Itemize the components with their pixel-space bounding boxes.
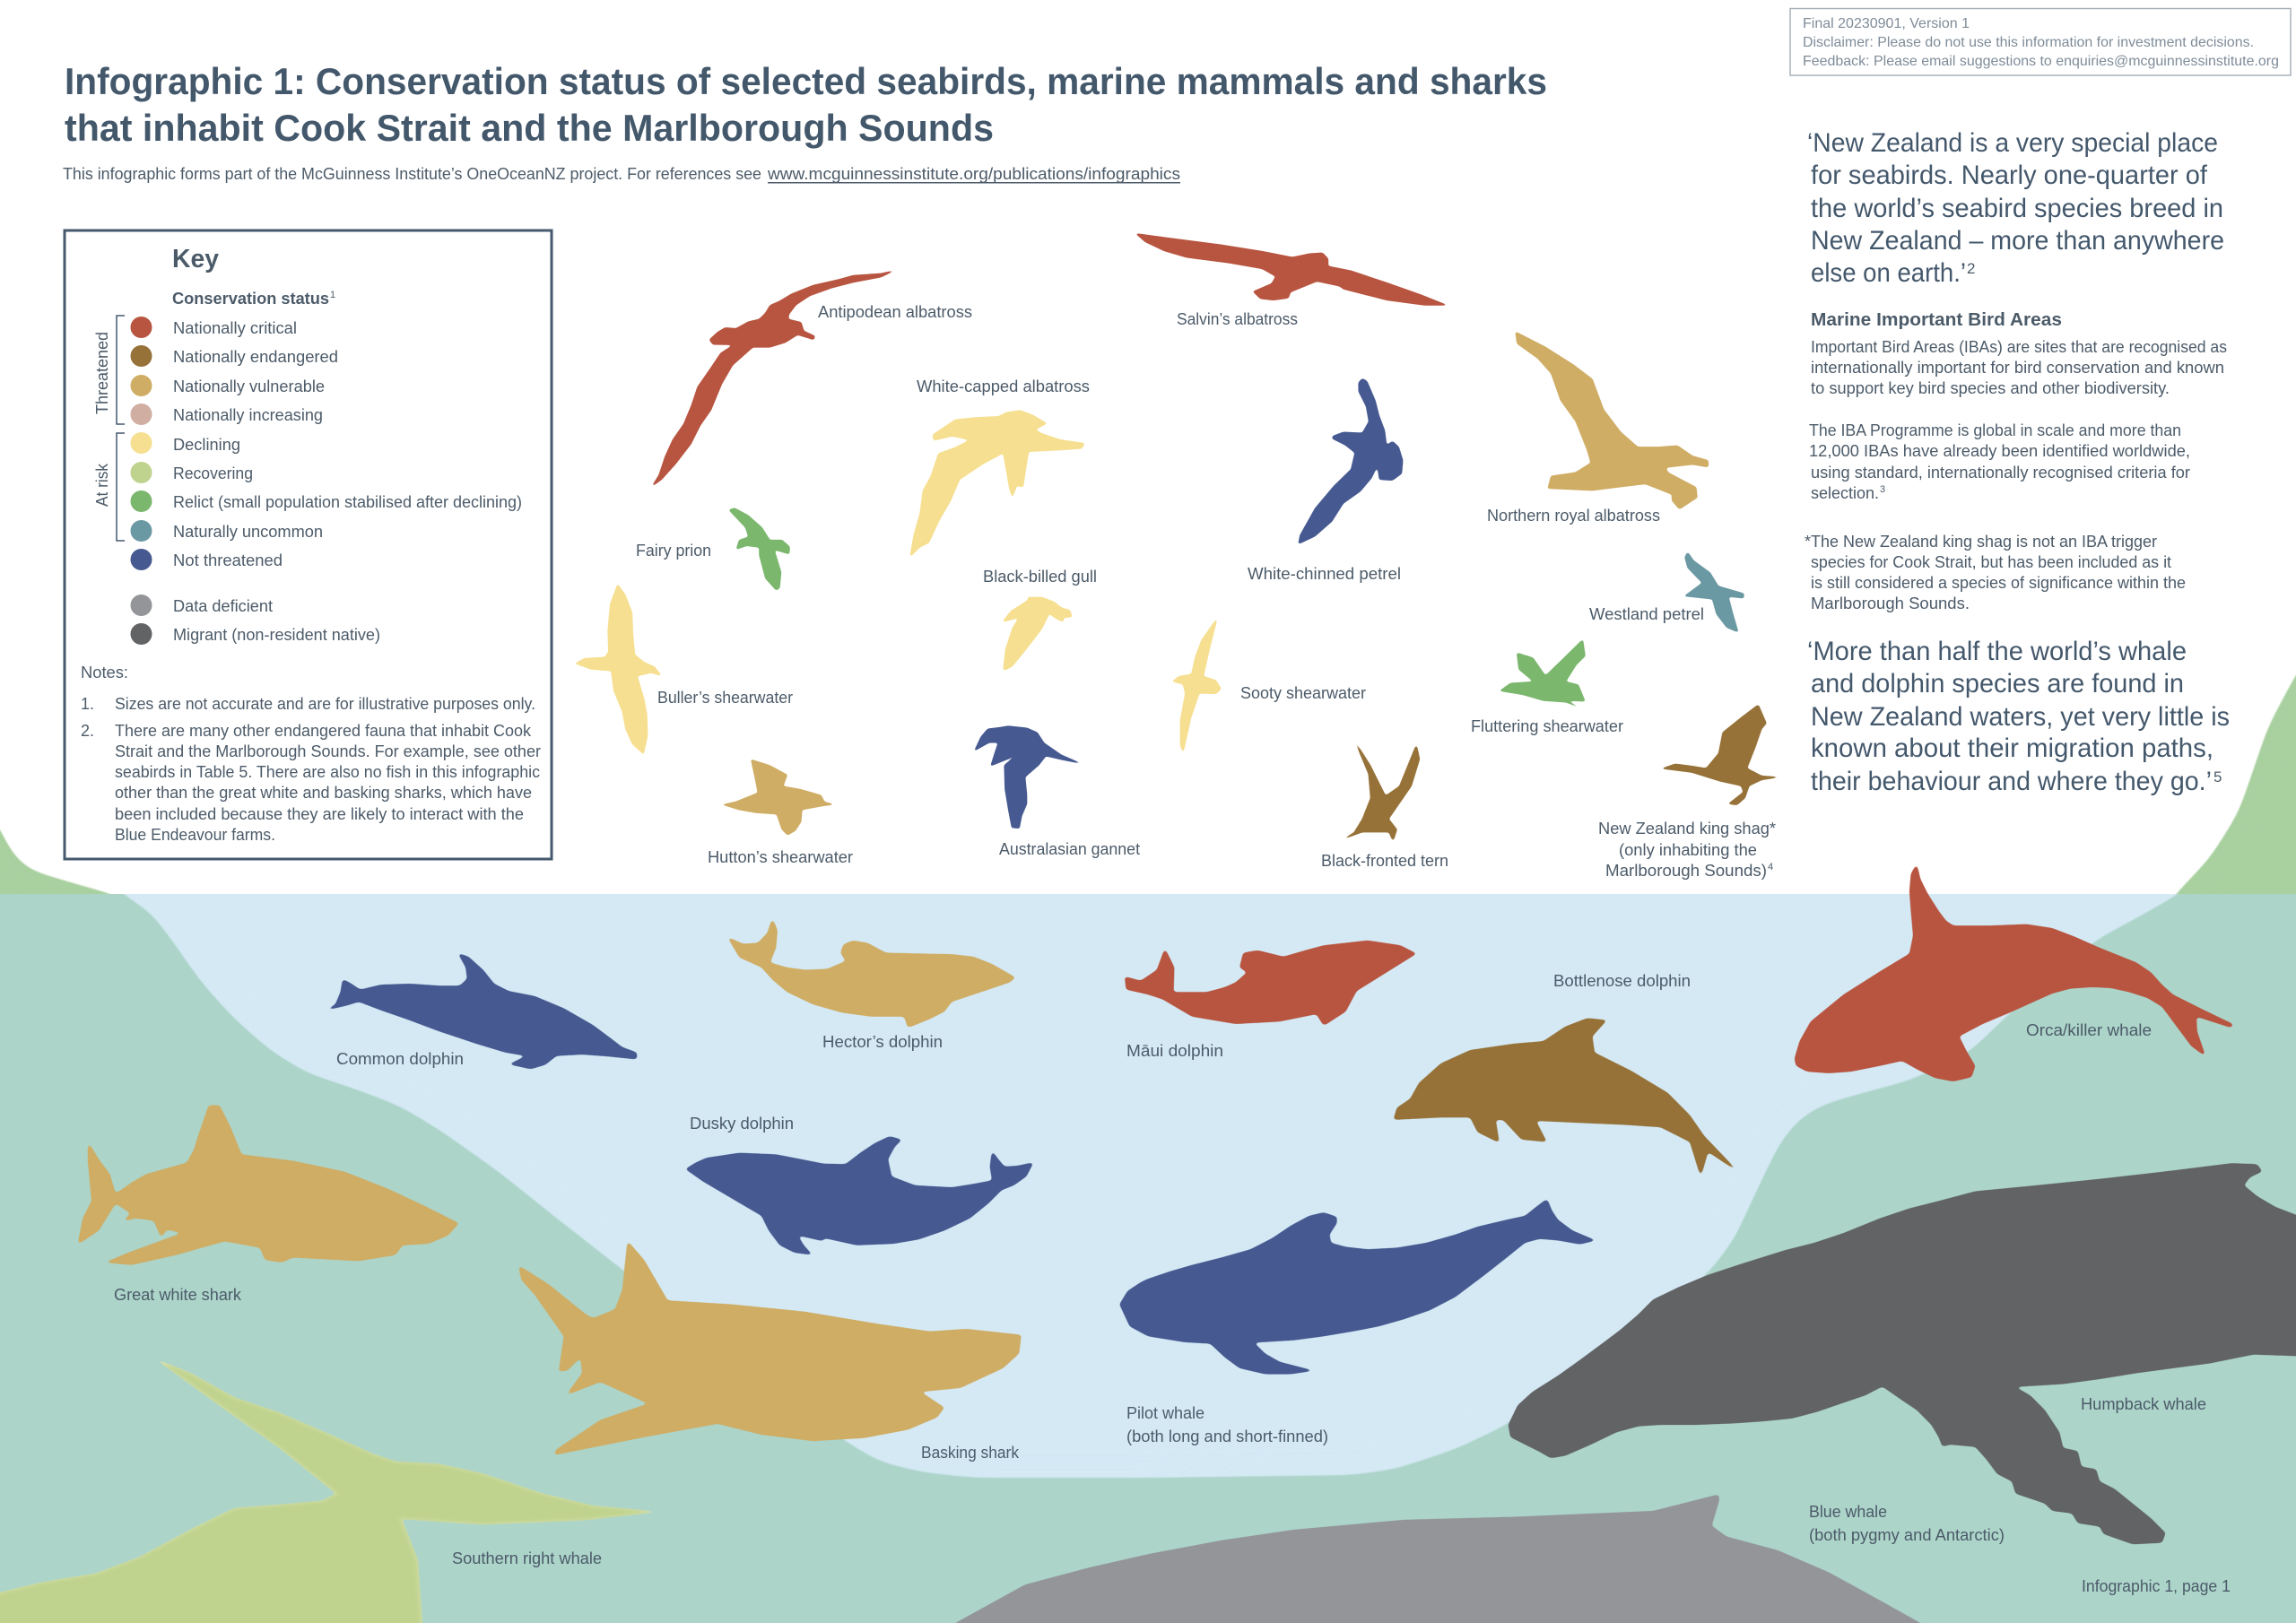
animal: Common dolphin: Common dolphin (336, 1050, 464, 1068)
notes: other than the great white and basking sharks, which have (115, 784, 532, 802)
notes: been included because they are likely to interact with the (115, 805, 524, 823)
animal: Basking shark (518, 1240, 1022, 1462)
background: land above the water line, right (2135, 592, 2296, 950)
bird: Fluttering shearwater (1471, 639, 1623, 735)
conservation status heading: Conservation status (172, 290, 329, 308)
bird: Sooty shearwater: Sooty shearwater (1240, 684, 1366, 702)
legend: nationally endangered: Nationally endangered (173, 348, 338, 366)
conservation status heading: 1 (330, 290, 335, 300)
legend: naturally uncommon (131, 520, 323, 542)
bird: Hutton's shearwater: Hutton’s shearwater (708, 848, 853, 866)
animal: Bottlenose dolphin: Bottlenose dolphin (1553, 972, 1691, 990)
animal: Great white shark: Great white shark (114, 1286, 242, 1304)
bird: Australasian gannet (974, 725, 1140, 858)
legend: data deficient: Data deficient (173, 597, 273, 615)
bird: Buller's shearwater: Buller’s shearwater (657, 689, 793, 707)
legend: nationally increasing: Nationally increasing (173, 406, 323, 424)
quote: whales and dolphins: ‘More than half the world’s whale (1807, 637, 2187, 666)
quote: whales and dolphins: and dolphin species are found in (1811, 669, 2184, 699)
bird: Antipodean albatross: Antipodean albatross (818, 303, 972, 321)
bird: Antipodean albatross (651, 270, 972, 487)
text block: Marine Important Bird Areas: The IBA Programme is global in scale and more than (1809, 421, 2181, 439)
animal: Māui dolphin (1125, 941, 1417, 1060)
legend: naturally uncommon: Naturally uncommon (173, 523, 323, 541)
quote: seabirds: ‘New Zealand is a very special place (1807, 128, 2218, 158)
page number: Infographic 1, page 1 (2082, 1577, 2231, 1595)
legend: nationally critical (131, 317, 297, 338)
quote: seabirds: for seabirds. Nearly one-quarter of (1811, 161, 2208, 190)
bird: New Zealand king shag (1598, 704, 1781, 880)
quote: whales and dolphins: 5 (2213, 768, 2222, 785)
legend: relict: Relict (small population stabilised after declining) (173, 493, 522, 511)
animal: Southern right whale (0, 1360, 656, 1623)
legend: nationally vulnerable: Nationally vulnerable (173, 378, 325, 395)
legend: recovering (131, 462, 253, 483)
bird: Salvin's albatross: Salvin’s albatross (1177, 310, 1298, 328)
animal: Dusky dolphin (685, 1115, 1034, 1255)
footnote: king shag: Marlborough Sounds. (1811, 595, 1970, 612)
legend: nationally vulnerable (131, 375, 325, 396)
text block: Marine Important Bird Areas: Marine Important Bird Areas (1811, 310, 2062, 330)
quote: seabirds: else on earth.’ (1811, 258, 1966, 288)
legend: migrant: Migrant (non-resident native) (173, 626, 380, 644)
background: open water (124, 894, 2178, 1478)
bird: Northern royal albatross: Northern royal albatross (1487, 507, 1660, 525)
background: coastal shallows (0, 894, 2296, 1623)
subtitle with reference link: This infographic forms part of the McGuinness Institute’s OneOceanNZ project. For references see (63, 164, 761, 183)
notes: 1. (81, 695, 94, 713)
quote: seabirds (1807, 128, 2224, 288)
bird: Salvin's albatross (1135, 233, 1448, 328)
bird: New Zealand king shag: (only inhabiting the (1619, 841, 1757, 859)
text block: Marine Important Bird Areas: selection. (1811, 484, 1879, 502)
at risk bracket: At risk (93, 463, 111, 507)
quote: whales and dolphins (1807, 637, 2230, 796)
animal: Pilot whale (1119, 1199, 1596, 1445)
animal: Blue whale: Blue whale (1809, 1503, 1887, 1521)
animal: Orca/killer whale: Orca/killer whale (2026, 1021, 2152, 1039)
bird: New Zealand king shag: 4 (1768, 862, 1773, 872)
quote: seabirds: New Zealand – more than anywhere (1811, 226, 2224, 256)
disclaimer box: Feedback: Please email suggestions to enquiries@mcguinnessinstitute.org (1803, 54, 2279, 69)
animal: Southern right whale: Southern right whale (452, 1549, 602, 1567)
subtitle with reference link: www.mcguinnessinstitute.org/publications/infographics (767, 164, 1180, 183)
footnote: king shag: *The New Zealand king shag is not an IBA trigger (1805, 533, 2157, 551)
legend: nationally endangered (131, 345, 338, 367)
footnote: king shag: species for Cook Strait, but has been included as it (1811, 553, 2171, 571)
notes: There are many other endangered fauna that inhabit Cook (115, 722, 532, 740)
text block: Marine Important Bird Areas: Important Bird Areas (IBAs) are sites that are recognised as (1811, 338, 2227, 356)
animal: Orca/killer whale (1795, 864, 2233, 1081)
notes: Notes: (81, 664, 128, 681)
animal: Common dolphin (325, 952, 637, 1069)
text block: Marine Important Bird Areas: 3 (1880, 484, 1885, 495)
bird: Black-fronted tern: Black-fronted tern (1321, 852, 1448, 870)
quote: seabirds: 2 (1967, 260, 1975, 277)
legend: data deficient (131, 595, 273, 616)
text block: Marine Important Bird Areas (1809, 310, 2227, 502)
animal: Humpback whale (1509, 1163, 2296, 1544)
legend: migrant (131, 623, 380, 645)
bird: Sooty shearwater (1172, 616, 1366, 754)
animal: Hector's dolphin: Hector’s dolphin (822, 1033, 943, 1051)
legend: nationally increasing (131, 404, 323, 425)
animal: Dusky dolphin: Dusky dolphin (690, 1115, 794, 1133)
bird: New Zealand king shag: Marlborough Sounds) (1605, 862, 1767, 880)
notes: 2. (81, 722, 94, 740)
text block: Marine Important Bird Areas: to support key bird species and other biodiversity. (1811, 379, 2170, 397)
text block: Marine Important Bird Areas: internationally important for bird conservation and known (1811, 359, 2224, 377)
disclaimer box (1790, 9, 2291, 75)
disclaimer box: Disclaimer: Please do not use this information for investment decisions. (1803, 35, 2254, 50)
animal: Great white shark (78, 1105, 459, 1304)
disclaimer box: Final 20230901, Version 1 (1803, 16, 1970, 31)
panel: key (65, 230, 552, 859)
legend: recovering: Recovering (173, 464, 253, 482)
animal: Bottlenose dolphin (1393, 972, 1740, 1177)
bird: Hutton's shearwater (708, 759, 853, 866)
text block: Marine Important Bird Areas: 12,000 IBAs have already been identified worldwide, (1809, 442, 2190, 460)
bird: Fluttering shearwater: Fluttering shearwater (1471, 717, 1623, 735)
at risk bracket (93, 433, 125, 541)
threatened bracket: Threatened (93, 332, 111, 414)
quote: seabirds: the world’s seabird species breed in (1811, 194, 2223, 223)
notes: seabirds in Table 5. There are also no fish in this infographic (115, 763, 540, 781)
bird: Westland petrel (1589, 551, 1744, 633)
background: land above the water line, left (0, 771, 179, 950)
animal: Humpback whale: Humpback whale (2081, 1395, 2206, 1413)
key heading: Key (172, 245, 219, 273)
notes: Sizes are not accurate and are for illustrative purposes only. (115, 695, 535, 713)
bird: Fairy prion (636, 508, 790, 590)
title: Infographic 1: Conservation status of selected seabirds, marine mammals and sharks (65, 60, 1547, 102)
legend: declining (131, 432, 240, 454)
notes: Blue Endeavour farms. (115, 826, 275, 844)
animal: Māui dolphin: Māui dolphin (1126, 1042, 1223, 1060)
bird: Black-fronted tern (1321, 738, 1448, 870)
bird: New Zealand king shag: New Zealand king shag* (1598, 820, 1776, 838)
bird: Northern royal albatross (1487, 331, 1709, 525)
bird: Westland petrel: Westland petrel (1589, 605, 1704, 623)
animal: Pilot whale: (both long and short-finned) (1126, 1428, 1328, 1445)
legend: declining: Declining (173, 436, 240, 454)
bird: Buller's shearwater (575, 584, 793, 755)
animal: Hector's dolphin (727, 917, 1015, 1051)
text block: Marine Important Bird Areas: using standard, internationally recognised criteria for (1811, 464, 2190, 482)
quote: whales and dolphins: known about their migration paths, (1811, 733, 2213, 763)
animal: Basking shark: Basking shark (921, 1444, 1020, 1462)
legend: not threatened (131, 549, 283, 570)
legend: not threatened: Not threatened (173, 551, 283, 569)
title (65, 60, 1547, 149)
title: that inhabit Cook Strait and the Marlborough Sounds (65, 107, 994, 149)
notes: Strait and the Marlborough Sounds. For example, see other (115, 742, 541, 760)
bird: White-chinned petrel: White-chinned petrel (1248, 565, 1401, 583)
bird: Black-billed gull: Black-billed gull (983, 568, 1097, 586)
bird: Fairy prion: Fairy prion (636, 542, 711, 560)
bird: Australasian gannet: Australasian gannet (999, 840, 1140, 858)
bird: Black-billed gull (983, 568, 1097, 670)
animal: Blue whale: (both pygmy and Antarctic) (1809, 1526, 2005, 1544)
bird: White-chinned petrel (1248, 378, 1403, 583)
animal: Pilot whale: Pilot whale (1126, 1404, 1205, 1422)
bird: White-capped albatross: White-capped albatross (917, 378, 1090, 395)
quote: whales and dolphins: New Zealand waters, yet very little is (1811, 702, 2230, 732)
threatened bracket (93, 316, 125, 424)
quote: whales and dolphins: their behaviour and where they go.’ (1811, 767, 2212, 796)
subtitle with reference link (63, 164, 1180, 183)
bird: White-capped albatross (909, 378, 1090, 557)
animal: Blue whale (935, 1494, 2005, 1623)
footnote: king shag: is still considered a species of significance within the (1811, 574, 2186, 592)
footnote: king shag (1805, 533, 2186, 612)
notes (81, 664, 541, 844)
legend: nationally critical: Nationally critical (173, 319, 297, 337)
